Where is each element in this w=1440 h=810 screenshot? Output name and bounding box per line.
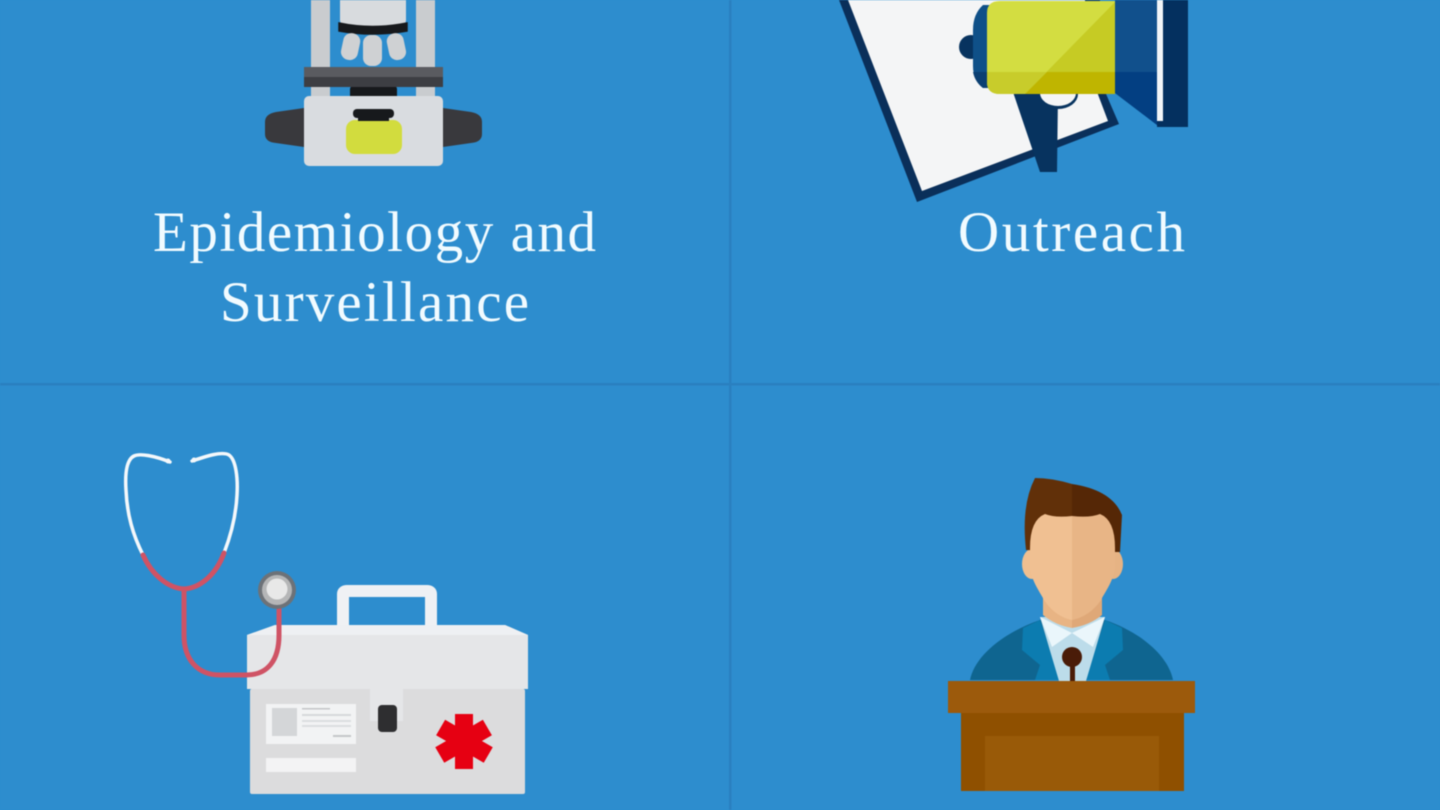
heading: epidemiology and surveillance: Epidemiology and <box>153 201 596 264</box>
icon: microphone <box>1062 647 1082 683</box>
icon: red medical asterisk <box>435 714 493 769</box>
icon: clipboard and megaphone <box>839 0 1188 202</box>
heading: epidemiology and surveillance: Surveillance <box>220 271 529 334</box>
icon: medical kit <box>247 591 528 794</box>
panel: speaker at podium <box>948 478 1195 791</box>
icon: microscope <box>265 0 482 166</box>
panel: outreach <box>839 0 1188 264</box>
icon: podium <box>948 681 1195 791</box>
panel: epidemiology and surveillance <box>153 0 612 334</box>
heading: outreach: Outreach <box>958 201 1185 264</box>
panel: clinical care <box>126 454 528 794</box>
icon: stethoscope <box>126 454 296 675</box>
icon: speaker <box>970 478 1173 683</box>
